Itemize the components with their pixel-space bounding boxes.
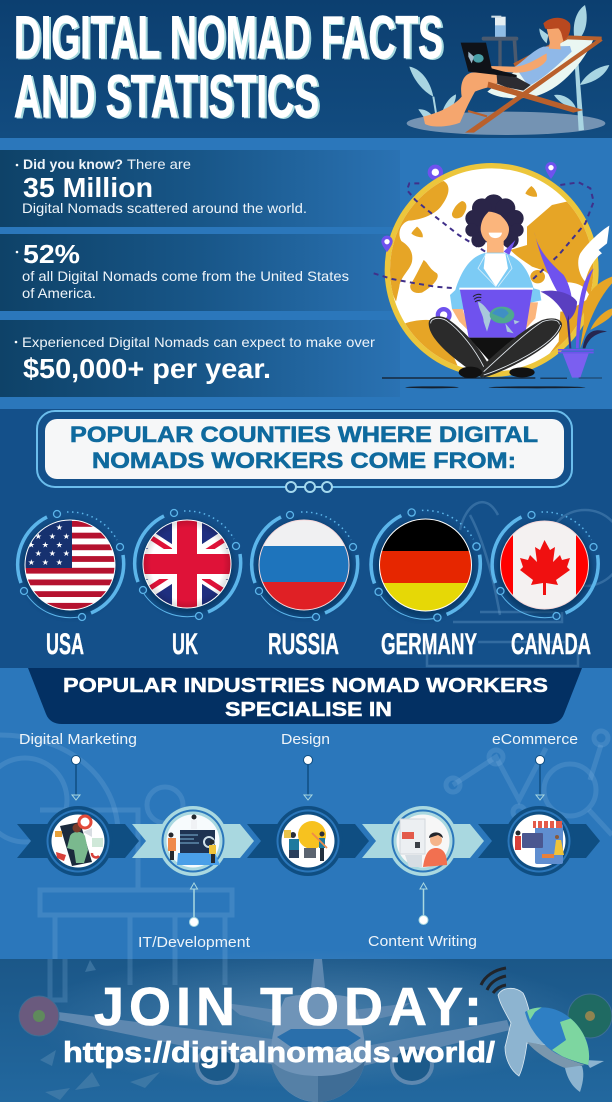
- flag: Germany: [371, 509, 480, 621]
- industry: Content Writing: Content Writing: [368, 933, 477, 950]
- panel: 52 percent fact: [0, 234, 400, 311]
- flag: Russia: [252, 512, 358, 620]
- plant: [534, 226, 612, 378]
- call to action: https://digitalnomads.world/: [63, 1037, 495, 1069]
- country labels: [46, 628, 591, 661]
- icon: globe turtle: [481, 968, 604, 1092]
- flag: USA: ★★★: [35, 532, 70, 541]
- country labels: RUSSIA: [268, 628, 339, 661]
- panel: 52 percent fact: of all Digital Nomads come from the United States: [22, 268, 349, 284]
- industry: Design: Design: [281, 731, 330, 748]
- dashed flight routes: [374, 182, 594, 288]
- flag: UK: [127, 510, 247, 620]
- section: popular countries: [0, 409, 612, 668]
- industry: eCommerce: [492, 731, 578, 876]
- industry: Design: [273, 731, 343, 876]
- panel: earnings fact: $50,000+ per year.: [23, 353, 271, 384]
- illustration: woman with laptop and globe: [374, 162, 612, 388]
- panel: 52 percent fact: 52%: [23, 239, 80, 269]
- panel: 35 million fact: Did you know?: [23, 156, 123, 172]
- panel: earnings fact: Experienced Digital Nomads can expect to make over: [22, 334, 375, 350]
- industry: IT/Development: IT/Development: [138, 934, 251, 951]
- map pins: [381, 162, 557, 252]
- industry: Digital Marketing: Digital Marketing: [19, 731, 137, 748]
- woman: [429, 194, 562, 378]
- call to action: JOIN TODAY:: [94, 977, 482, 1037]
- flag: USA: [18, 510, 124, 620]
- map pin behind globe: [428, 165, 443, 180]
- panel: earnings fact: [0, 320, 400, 397]
- industry: eCommerce: eCommerce: [492, 731, 578, 748]
- birds silhouettes: [40, 960, 160, 1100]
- panel: 35 million fact: [0, 150, 400, 227]
- heading box: NOMADS WORKERS COME FROM:: [92, 448, 516, 473]
- globe: [382, 163, 602, 378]
- banner: popular industries heading: POPULAR INDUSTRIES NOMAD WORKERS: [63, 675, 548, 697]
- flag: Canada: [492, 512, 598, 620]
- process chevrons: [17, 824, 600, 858]
- decorative planets: [19, 994, 612, 1038]
- country labels: USA: [46, 628, 84, 661]
- banner: popular industries heading: [28, 668, 582, 724]
- illustration: man in deck chair with laptop: [407, 5, 609, 135]
- flag: USA: ★: [56, 523, 63, 532]
- footer: join today: [0, 950, 612, 1102]
- panel: 35 million fact: 35 Million: [23, 172, 153, 203]
- panel: 35 million fact: Digital Nomads scattered around the world.: [22, 200, 307, 216]
- ground line: [382, 377, 602, 388]
- heading box: POPULAR COUNTIES WHERE DIGITAL: [70, 422, 538, 447]
- country labels: UK: [172, 628, 198, 661]
- heading box: [37, 411, 572, 492]
- panel: 52 percent fact: of America.: [22, 285, 96, 301]
- industry: Content Writing: [368, 806, 477, 950]
- flag: USA: ★★★: [28, 540, 63, 550]
- title: [14, 4, 443, 130]
- header band: [0, 0, 612, 138]
- country labels: GERMANY: [381, 628, 477, 661]
- title: AND STATISTICS: [14, 63, 319, 130]
- section: popular industries background watermark: [0, 731, 612, 1030]
- flag: USA: ★★★: [28, 558, 63, 567]
- watermark: beach items: [427, 502, 612, 666]
- panel: 35 million fact: There are: [127, 156, 191, 172]
- industry: Digital Marketing: [19, 731, 137, 876]
- faded columns: [50, 959, 225, 1000]
- industry: IT/Development: [138, 806, 251, 951]
- flag: USA: ★★★: [35, 549, 70, 558]
- plane: [58, 959, 510, 1102]
- banner: popular industries heading: SPECIALISE IN: [225, 699, 392, 721]
- call to action: [63, 977, 495, 1069]
